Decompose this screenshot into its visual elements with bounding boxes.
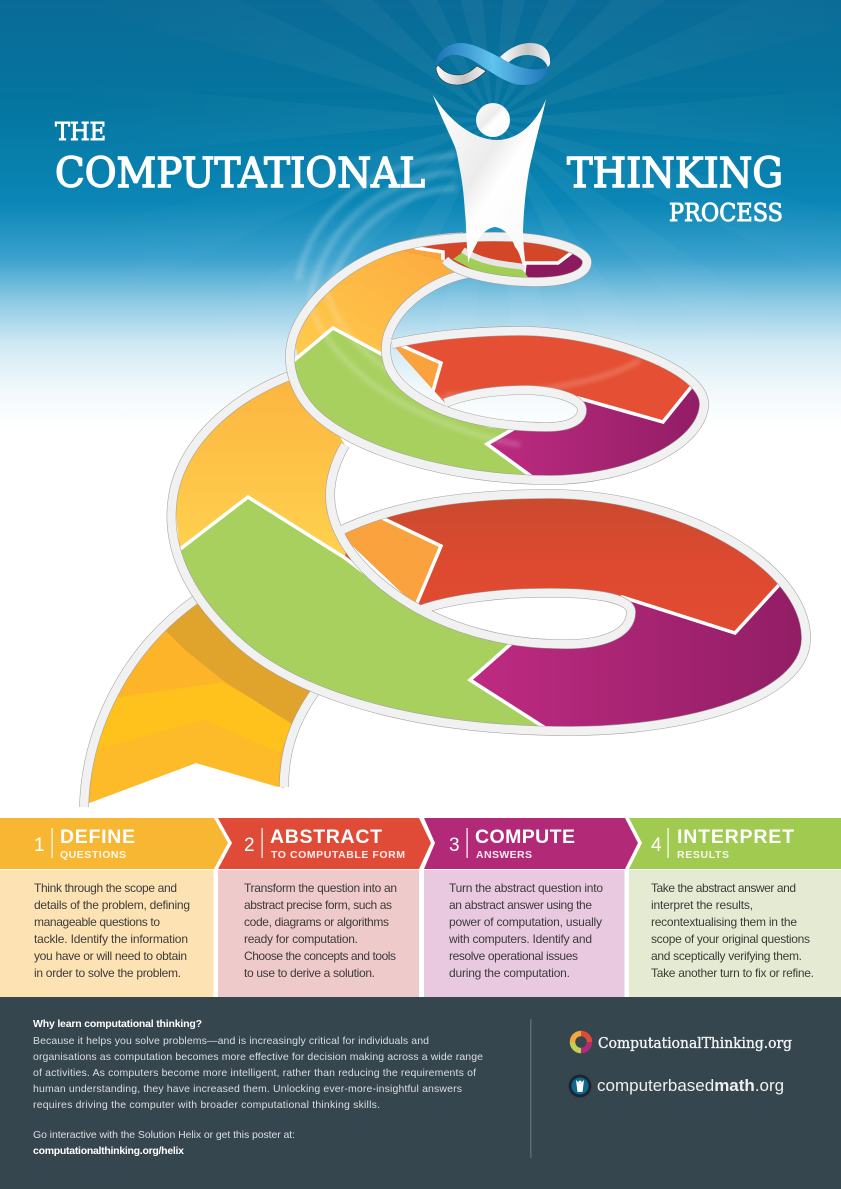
step text 1: you have or will need to obtain [34, 949, 187, 963]
step text 1 [34, 881, 190, 980]
segment: abstract red [396, 336, 690, 420]
panel: step 4 interpret [629, 818, 841, 997]
step heading 3: 3 [449, 835, 460, 856]
step text 3: during the computation. [449, 966, 570, 980]
step text 2: to use to derive a solution. [244, 966, 375, 980]
header arrow 3 [424, 818, 638, 869]
step heading 3 [449, 826, 575, 861]
title: COMPUTATIONAL [55, 149, 425, 197]
step heading 1: 1 [34, 835, 45, 856]
step text 3: resolve operational issues [449, 949, 578, 963]
step text 1: manageable questions to [34, 915, 160, 929]
step text 4: and sceptically verifying them. [651, 949, 802, 963]
title: THINKING [567, 149, 783, 197]
panel: footer [0, 997, 841, 1189]
panel: step 2 abstract [218, 818, 431, 997]
segment: define yellow [296, 250, 454, 356]
step text 1: details of the problem, defining [34, 898, 190, 912]
step heading 4: INTERPRET [677, 826, 794, 848]
segment: abstract orange [403, 247, 445, 261]
helix turn 1: top small ring [394, 232, 592, 287]
step text 4: Take the abstract answer and [651, 881, 796, 895]
header arrow 4 [629, 818, 841, 869]
icon: computational thinking ring logo [572, 1034, 590, 1050]
step heading 4 [651, 826, 794, 861]
step text 2: abstract precise form, such as [244, 898, 392, 912]
icon: infinity symbol [436, 43, 550, 85]
footer explanation text: requires driving the computer with broader computational thinking skills. [33, 1099, 380, 1111]
step heading 3: COMPUTE [475, 826, 575, 848]
step heading 1: QUESTIONS [60, 849, 126, 861]
step text 2: code, diagrams or algorithms [244, 915, 389, 929]
step text 4: Take another turn to fix or refine. [651, 966, 814, 980]
step heading 2: TO COMPUTABLE FORM [271, 849, 405, 861]
segment: abstract red [345, 498, 778, 631]
segment: abstract orange [396, 346, 444, 392]
step text 3: an abstract answer using the [449, 898, 592, 912]
title [55, 117, 783, 227]
computationalthinking.org wordmark: ComputationalThinking.org [598, 1036, 792, 1052]
segment: compute purple [472, 584, 802, 726]
step text 2 [244, 881, 397, 980]
step text 3: with computers. Identify and [448, 932, 592, 946]
helix turn 2: middle ring [270, 230, 720, 490]
segment: abstract orange [343, 515, 441, 610]
footer divider [530, 1019, 532, 1158]
footer explanation text: human understanding, they have increased them. Unlocking ever-more-insightful answers [33, 1083, 462, 1095]
step text 4: interpret the results, [651, 898, 753, 912]
footer explanation text [33, 1018, 483, 1157]
head [476, 103, 510, 137]
footer explanation text: organisations as computation becomes more effective for decision making across a wide range [33, 1051, 483, 1063]
step heading 4: RESULTS [677, 849, 729, 861]
figure: person with raised arms [433, 95, 546, 268]
swirling wisps in sky [298, 155, 456, 320]
step text 2: ready for computation. [244, 932, 358, 946]
helix turn 3: large lower ring [166, 372, 811, 736]
helix tail: yellow define ribbon [84, 600, 320, 807]
step text 1: in order to solve the problem. [34, 966, 181, 980]
footer explanation text: Why learn computational thinking? [33, 1018, 202, 1030]
step heading 1: DEFINE [60, 826, 135, 848]
icon: computer based math logo [568, 1074, 592, 1098]
step heading 2: ABSTRACT [270, 826, 382, 848]
body background 3 [424, 870, 624, 997]
footer explanation text: Because it helps you solve problems—and is increasingly critical for individuals and [33, 1035, 429, 1047]
header arrow 2 [218, 818, 431, 869]
step text 1: Think through the scope and [34, 881, 177, 895]
step text 3: Turn the abstract question into [449, 881, 603, 895]
step heading 1 [34, 826, 135, 861]
panel: step 1 define [0, 818, 228, 997]
step heading 3: ANSWERS [476, 849, 532, 861]
title: THE [55, 117, 106, 146]
title: PROCESS [669, 198, 783, 227]
step text 3: power of computation, usually [449, 915, 602, 929]
segment: compute purple [490, 386, 700, 476]
step heading 2 [244, 826, 405, 861]
background sky gradient [0, 0, 841, 430]
computerbasedmath.org wordmark: computerbasedmath.org [597, 1076, 784, 1095]
footer explanation text: computationalthinking.org/helix [33, 1145, 184, 1157]
body background 4 [629, 870, 841, 997]
panel: step 3 compute [424, 818, 638, 997]
body background 1 [0, 870, 214, 997]
step heading 4: 4 [651, 835, 662, 856]
sunburst rays [328, 0, 658, 234]
segment: define yellow [176, 381, 346, 556]
segment: interpret green [453, 252, 528, 278]
footer explanation text: of activities. As computers become more intelligent, rather than reducing the requirements of [33, 1067, 476, 1079]
segment: compute purple [522, 252, 582, 278]
step heading 2: 2 [244, 835, 255, 856]
step text 2: Choose the concepts and tools [244, 949, 396, 963]
footer explanation text: Go interactive with the Solution Helix or get this poster at: [33, 1129, 295, 1141]
motion streaks across ring [310, 285, 640, 445]
step text 3 [448, 881, 603, 980]
segment: interpret green [180, 494, 546, 726]
step text 4 [651, 881, 814, 980]
step text 4: scope of your original questions [651, 932, 810, 946]
header arrow 1 [0, 818, 228, 869]
body background 2 [218, 870, 419, 997]
step text 2: Transform the question into an [244, 881, 397, 895]
step text 4: recontextualising them in the [651, 915, 797, 929]
segment: abstract red [403, 242, 569, 270]
step text 1: tackle. Identify the information [34, 932, 188, 946]
segment: interpret green [294, 326, 532, 475]
